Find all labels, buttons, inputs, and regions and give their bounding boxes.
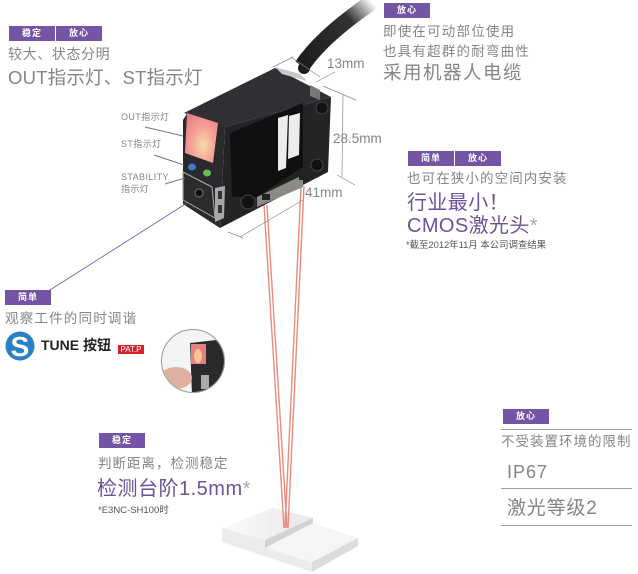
cable xyxy=(302,2,372,66)
dimension lines xyxy=(228,57,356,238)
footnote: *截至2012年11月 本公司调查结果 xyxy=(406,239,546,250)
label: stability indicator: STABILITY xyxy=(121,172,169,182)
heading: IP67: IP67 xyxy=(507,462,548,482)
badge: stable: 稳定 xyxy=(22,28,42,38)
badge: reassured environment xyxy=(503,409,549,424)
text: narrow space: 也可在狭小的空间内安装 xyxy=(407,171,568,186)
badge: stable: 稳定 xyxy=(112,435,132,445)
footnote: *E3NC-SH100时 xyxy=(98,505,169,516)
label: OUT indicator: OUT指示灯 xyxy=(121,112,169,122)
badge: reassured environment: 放心 xyxy=(516,411,536,421)
dimension: 41mm: 41mm xyxy=(305,185,343,200)
icon: S tune logo: S xyxy=(11,331,29,362)
control panel xyxy=(183,172,215,218)
dimension: 13mm: 13mm xyxy=(327,56,365,71)
label: ST indicator: ST指示灯 xyxy=(121,139,162,149)
text: cable description: 即使在可动部位使用 xyxy=(383,24,515,39)
workpiece block xyxy=(222,508,358,572)
inset photo xyxy=(160,330,225,395)
STABILITY indicator xyxy=(203,170,211,176)
badge: simple: 简单 xyxy=(421,153,441,163)
badge: simple xyxy=(5,290,51,305)
text: distance judgment: 判断距离，检测稳定 xyxy=(98,456,228,471)
sensor body xyxy=(183,62,331,228)
label: stability indicator: 指示灯 xyxy=(121,184,149,194)
badge: patent: PAT.P xyxy=(120,345,142,354)
OUT indicator xyxy=(185,113,218,163)
badge: stable xyxy=(9,26,55,41)
label: stability indicator xyxy=(121,172,169,194)
laser beams xyxy=(264,186,304,528)
heading: laser class 2: 激光等级2 xyxy=(507,498,598,519)
badge: reassured xyxy=(455,151,501,166)
badge: stable xyxy=(99,433,145,448)
leader lines xyxy=(145,127,185,184)
text: big and clear: 较大、状态分明 xyxy=(8,46,110,62)
heading: robot cable: 采用机器人电缆 xyxy=(383,62,523,83)
icon: S tune logo xyxy=(6,331,34,362)
heading: smallest CMOS laser head: 行业最小！ xyxy=(407,192,509,214)
text: TUNE button: TUNE 按钮 xyxy=(41,337,111,353)
badge: reassured: 放心 xyxy=(69,28,89,38)
purple leader xyxy=(50,203,187,290)
text: cable description xyxy=(383,24,530,59)
badge: reassured cable: 放心 xyxy=(397,5,417,15)
badge: reassured: 放心 xyxy=(468,153,488,163)
badge: simple: 简单 xyxy=(18,292,38,302)
ST indicator xyxy=(188,164,196,170)
heading: detection step: 检测台阶1.5mm* xyxy=(97,478,251,500)
badge: simple xyxy=(408,151,454,166)
heading: smallest CMOS laser head: CMOS激光头* xyxy=(407,214,538,236)
text: unaffected by environment: 不受装置环境的限制 xyxy=(501,434,632,449)
heading: OUT and ST indicators: OUT指示灯、ST指示灯 xyxy=(8,67,203,88)
badge: reassured xyxy=(56,26,102,41)
sensor illustration xyxy=(6,0,376,572)
text: cable description: 也具有超群的耐弯曲性 xyxy=(383,44,530,59)
text: observe workpiece: 观察工件的同时调谐 xyxy=(5,311,137,326)
badge: reassured cable xyxy=(384,3,430,18)
dimension: 28.5mm: 28.5mm xyxy=(333,131,382,146)
heading: smallest CMOS laser head xyxy=(407,192,538,236)
